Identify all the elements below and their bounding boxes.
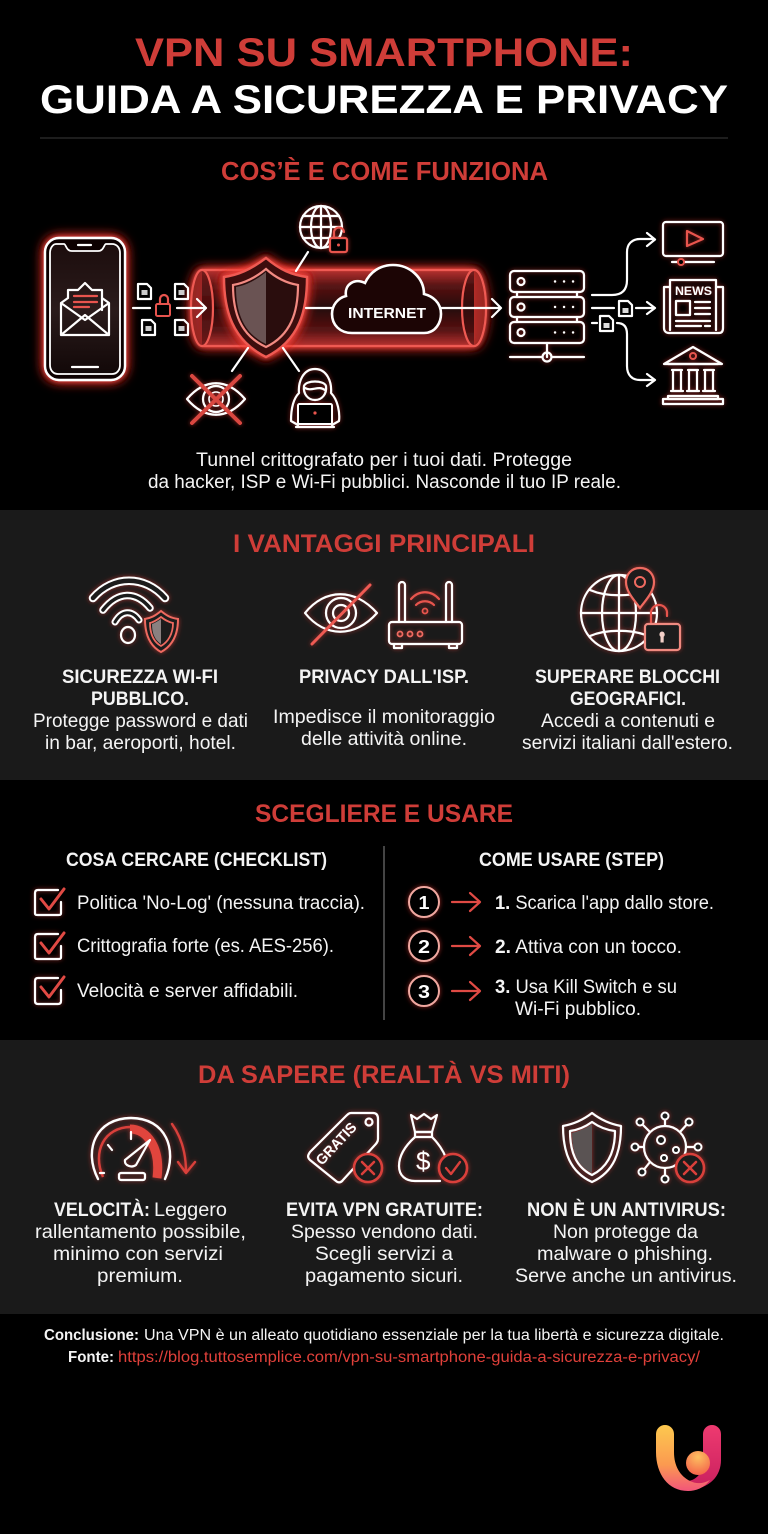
icon: phone with envelope	[45, 238, 125, 380]
band: vantaggi background	[0, 510, 768, 780]
text: vpn gratuite	[286, 1200, 483, 1287]
conclusion and source: Una VPN è un alleato quotidiano essenziale per la tua libertà e sicurezza digitale.	[144, 1327, 724, 1344]
text: velocità: VELOCITÀ:	[54, 1199, 150, 1221]
band: da sapere background	[0, 1040, 768, 1314]
step 3: Wi-Fi pubblico.	[515, 999, 641, 1020]
text: velocità	[35, 1199, 246, 1287]
icon: news: NEWS	[675, 286, 712, 298]
item: no-log	[35, 889, 365, 915]
icon: globe pin lock	[581, 568, 680, 651]
panel: non è un antivirus	[515, 1112, 737, 1287]
icon: shield	[224, 258, 307, 357]
step 2: 2. Attiva con un tocco.	[495, 937, 682, 958]
arrow: shield to internet to server	[306, 299, 501, 317]
text block: tunnel description: da hacker, ISP e Wi-Fi pubblici. Nasconde il tuo IP reale.	[148, 472, 621, 493]
text: velocità: minimo con servizi	[53, 1244, 223, 1265]
title: GUIDA A SICUREZZA E PRIVACY	[40, 78, 728, 122]
text: velocità: rallentamento possibile,	[35, 1222, 246, 1243]
icon: bank	[663, 347, 723, 404]
subheading: checklist: COSA CERCARE (CHECKLIST)	[66, 850, 327, 871]
item: crittografia: Crittografia forte (es. AES-256).	[77, 936, 334, 957]
text: privacy dall'isp	[273, 667, 495, 750]
text: non è un antivirus	[515, 1199, 737, 1287]
text: non è un antivirus: Serve anche un antivirus.	[515, 1266, 737, 1287]
item: velocità	[35, 977, 298, 1004]
arrow: phone to tunnel with encrypted docs	[133, 284, 206, 335]
item: velocità: Velocità e server affidabili.	[77, 981, 298, 1002]
text: privacy dall'isp: PRIVACY DALL'ISP.	[299, 667, 469, 688]
text: non è un antivirus: NON È UN ANTIVIRUS:	[527, 1199, 726, 1221]
text: vpn gratuite: Scegli servizi a	[315, 1244, 453, 1265]
conclusion and source: https://blog.tuttosemplice.com/vpn-su-smartphone-guida-a-sicurezza-e-privacy/	[118, 1349, 701, 1366]
step 1: 1. Scarica l'app dallo store.	[495, 893, 714, 914]
icon: shield and virus	[563, 1112, 704, 1182]
heading: scegliere e usare: SCEGLIERE E USARE	[255, 800, 513, 828]
text: non è un antivirus: Non protegge da	[553, 1222, 698, 1243]
panel: checklist	[35, 850, 365, 1004]
text block: tunnel description: Tunnel crittografato per i tuoi dati. Protegge	[196, 450, 572, 471]
icon: video screen	[663, 222, 723, 265]
text: privacy dall'isp: delle attività online.	[301, 729, 467, 750]
text: velocità: Leggero	[154, 1200, 227, 1221]
text: blocchi geografici: servizi italiani dall'estero.	[522, 733, 733, 754]
text: blocchi geografici: Accedi a contenuti e	[541, 711, 715, 732]
text: vpn gratuite: EVITA VPN GRATUITE:	[286, 1200, 483, 1221]
text: non è un antivirus: malware o phishing.	[537, 1244, 713, 1265]
panel: velocità	[35, 1118, 246, 1287]
icon: cloud internet: INTERNET	[348, 305, 426, 322]
arrows: server to destinations	[592, 233, 655, 386]
icon: wifi shield	[93, 581, 178, 652]
text: blocchi geografici	[522, 667, 733, 754]
connectors around shield	[232, 252, 308, 371]
icon: hacker	[291, 369, 339, 427]
icon: gauge	[92, 1118, 195, 1180]
icon: crossed eye	[187, 376, 245, 423]
icon: vpn server	[510, 271, 584, 362]
text: sicurezza wi-fi	[33, 667, 248, 754]
icon: gratis tag and money bag	[308, 1113, 467, 1182]
panel: vpn gratuite	[286, 1113, 483, 1287]
icon: news	[664, 280, 723, 333]
text: velocità: premium.	[97, 1266, 183, 1287]
heading: i vantaggi principali: I VANTAGGI PRINCIPALI	[233, 530, 535, 558]
step 2	[409, 931, 682, 961]
panel: steps	[409, 850, 714, 1020]
title: VPN SU SMARTPHONE:	[135, 31, 633, 75]
step 2: 2	[418, 937, 430, 957]
item: no-log: Politica 'No-Log' (nessuna traccia).	[77, 893, 365, 914]
heading: cos'è e come funziona: COS’È E COME FUNZIONA	[221, 156, 548, 186]
text: sicurezza wi-fi: SICUREZZA WI-FI	[62, 667, 218, 688]
conclusion and source	[44, 1327, 724, 1366]
step 1: 1	[418, 893, 430, 913]
panel: blocchi geografici	[522, 568, 733, 754]
step 3: 3	[418, 982, 430, 1002]
logo	[656, 1425, 721, 1491]
icon: globe with lock	[300, 206, 347, 252]
step 3	[409, 976, 677, 1020]
icon: cloud internet	[332, 265, 441, 333]
text: sicurezza wi-fi: Protegge password e dati	[33, 711, 248, 732]
diagram: vpn tunnel	[45, 206, 723, 427]
panel: privacy dall'isp	[273, 582, 495, 750]
text: blocchi geografici: SUPERARE BLOCCHI	[535, 667, 720, 688]
text: vpn gratuite: Spesso vendono dati.	[291, 1222, 478, 1243]
item: crittografia	[35, 933, 334, 959]
conclusion and source: Fonte:	[68, 1349, 114, 1366]
heading: da sapere: DA SAPERE (REALTÀ VS MITI)	[198, 1060, 570, 1089]
text: sicurezza wi-fi: PUBBLICO.	[91, 689, 189, 710]
text: blocchi geografici: GEOGRAFICI.	[570, 689, 686, 710]
icon: gratis tag and money bag: $	[416, 1146, 431, 1176]
icon: tunnel	[191, 270, 486, 346]
icon: gratis tag and money bag: GRATIS	[313, 1120, 361, 1169]
text: vpn gratuite: pagamento sicuri.	[305, 1266, 463, 1287]
text: privacy dall'isp: Impedisce il monitoraggio	[273, 707, 495, 728]
title	[40, 31, 728, 122]
icon: eye and router	[305, 582, 462, 648]
step 3: 3. Usa Kill Switch e su	[495, 977, 677, 998]
text block: tunnel description	[148, 450, 621, 493]
text: sicurezza wi-fi: in bar, aeroporti, hotel.	[45, 733, 236, 754]
step 1	[409, 887, 714, 917]
conclusion and source: Conclusione:	[44, 1327, 139, 1344]
subheading: steps: COME USARE (STEP)	[479, 850, 664, 871]
panel: sicurezza wi-fi	[33, 581, 248, 754]
